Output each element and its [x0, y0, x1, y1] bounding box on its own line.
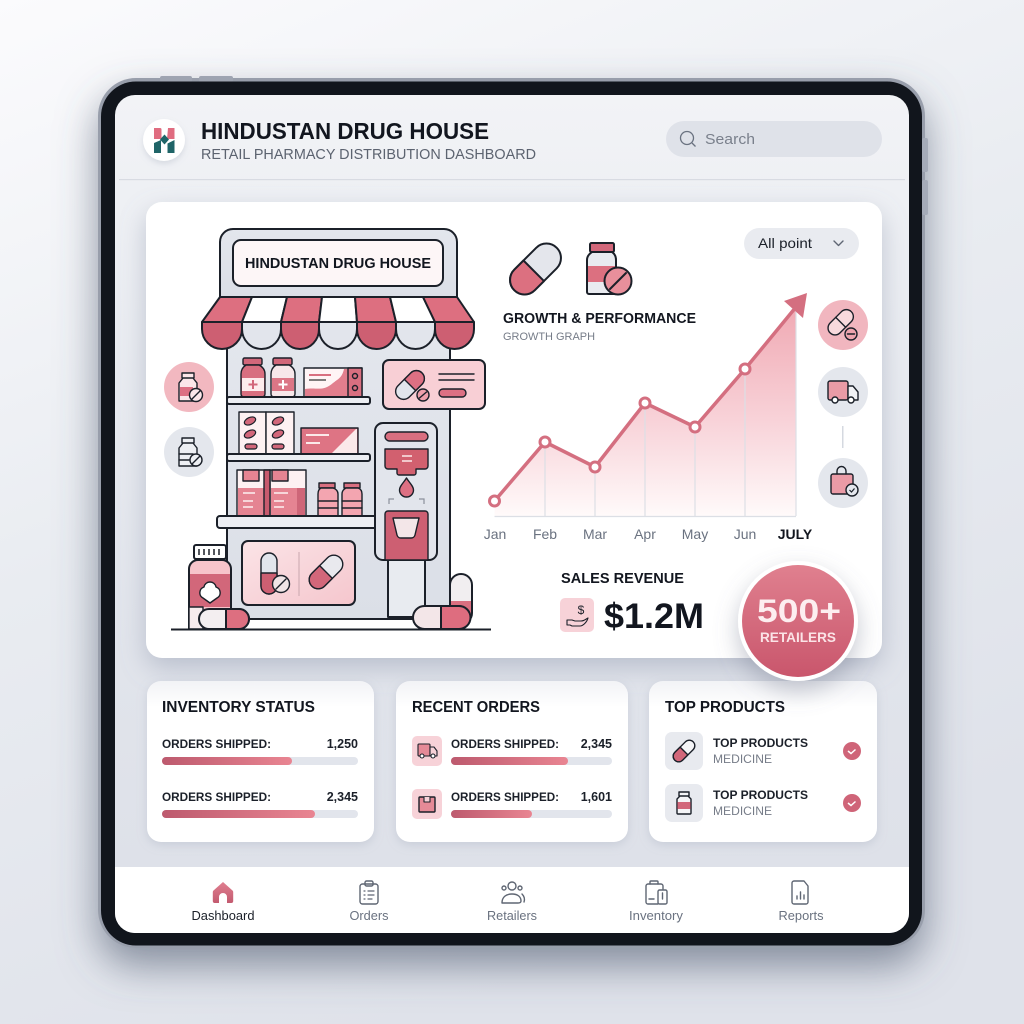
lower display panel [242, 541, 355, 605]
search box [666, 121, 882, 157]
kpi: sales revenue: $ [578, 603, 585, 617]
store body [227, 335, 450, 619]
kpi: sales revenue: SALES REVENUE [561, 571, 684, 587]
chart: growth line: Jun [734, 526, 756, 542]
panel: inventory status [147, 681, 374, 842]
chart: growth line: Mar [583, 526, 607, 542]
icon: capsule [504, 238, 567, 300]
store sign: HINDUSTAN DRUG HOUSE [245, 256, 431, 272]
heading: growth and performance [503, 311, 696, 343]
callout: pill tag [383, 360, 485, 409]
title: HINDUSTAN DRUG HOUSE [201, 118, 489, 144]
row 1 [451, 737, 612, 765]
panel: inventory status: INVENTORY STATUS [162, 699, 315, 716]
row 2 [162, 790, 358, 818]
chart: growth line: Apr [634, 526, 656, 542]
chart: growth line: Jan [484, 526, 506, 542]
icon: bottle badge gray [164, 427, 214, 477]
product row 1 [665, 732, 861, 770]
chart: growth line: JULY [778, 526, 813, 542]
row 1: ORDERS SHIPPED: [451, 737, 559, 751]
row 1: 2,345 [581, 737, 612, 751]
row 2: 1,601 [581, 790, 612, 804]
nav: inventory: Inventory [629, 909, 684, 923]
kpi: sales revenue [560, 571, 704, 636]
panel: top products [649, 681, 877, 842]
heading: growth and performance: GROWTH & PERFORMANCE [503, 311, 696, 327]
tablet device [98, 76, 928, 948]
nav: orders: Orders [350, 909, 388, 923]
chart: growth line [484, 293, 813, 542]
logo [143, 119, 185, 161]
panel: main hero [146, 202, 882, 658]
heading: growth and performance: GROWTH GRAPH [503, 331, 595, 343]
shelf 2 [227, 454, 370, 461]
product row 1: TOP PRODUCTS [713, 736, 808, 750]
icon: truck badge [818, 367, 868, 417]
illustration: pharmacy storefront [171, 229, 491, 630]
panel: recent orders [396, 681, 628, 842]
nav: orders [350, 881, 388, 923]
panel: top products: TOP PRODUCTS [665, 699, 785, 716]
capsules right [413, 574, 472, 629]
badge: 500+ retailers: 500+ [757, 593, 841, 629]
dispenser [375, 423, 437, 617]
nav: reports: Reports [778, 909, 824, 923]
sign frame [220, 229, 457, 297]
nav: retailers: Retailers [487, 909, 537, 923]
icon: capsule badge [818, 300, 868, 350]
product row 2 [665, 784, 861, 822]
icon: box [412, 789, 442, 819]
panel: recent orders: RECENT ORDERS [412, 699, 540, 716]
icon: truck [412, 736, 442, 766]
shelf 3 items [237, 470, 362, 516]
arrow head [784, 293, 807, 318]
subtitle: RETAIL PHARMACY DISTRIBUTION DASHBOARD [201, 147, 536, 163]
nav: inventory [629, 881, 684, 923]
product row 2: MEDICINE [713, 804, 772, 818]
chart: growth line: May [682, 526, 708, 542]
nav: reports [778, 881, 824, 923]
bottom navigation [115, 867, 909, 933]
row 1 [162, 737, 358, 765]
icon: bag badge [818, 458, 868, 508]
row 2: ORDERS SHIPPED: [451, 790, 559, 804]
product row 1: MEDICINE [713, 752, 772, 766]
badge: 500+ retailers: RETAILERS [760, 629, 836, 645]
awning [202, 297, 474, 349]
nav: retailers [487, 882, 537, 923]
chart: growth line: Feb [533, 526, 557, 542]
row 1: ORDERS SHIPPED: [162, 737, 271, 751]
capsule left [199, 609, 249, 629]
icon: bottle badge pink [164, 362, 214, 412]
nav: dashboard [192, 882, 255, 923]
header [119, 118, 905, 180]
store sign [233, 240, 443, 286]
shelf 2 items [239, 412, 358, 454]
kpi: sales revenue: $1.2M [604, 597, 704, 636]
base and ground line [171, 628, 491, 630]
search box: Search [705, 131, 755, 148]
dropdown: all point: All point [758, 235, 812, 251]
row 2: ORDERS SHIPPED: [162, 790, 271, 804]
nav: dashboard: Dashboard [192, 909, 255, 923]
badge: 500+ retailers [738, 561, 858, 681]
product row 2: TOP PRODUCTS [713, 788, 808, 802]
dropdown: all point [744, 228, 859, 259]
shelf 3 [217, 516, 377, 528]
row 1: 1,250 [327, 737, 358, 751]
shelf 1 items [241, 358, 362, 397]
medicine bottle [189, 545, 231, 629]
shelf 1 [227, 397, 370, 404]
icon: medicine bottle with tablet [587, 243, 632, 294]
row 2: 2,345 [327, 790, 358, 804]
row 2 [451, 790, 612, 818]
